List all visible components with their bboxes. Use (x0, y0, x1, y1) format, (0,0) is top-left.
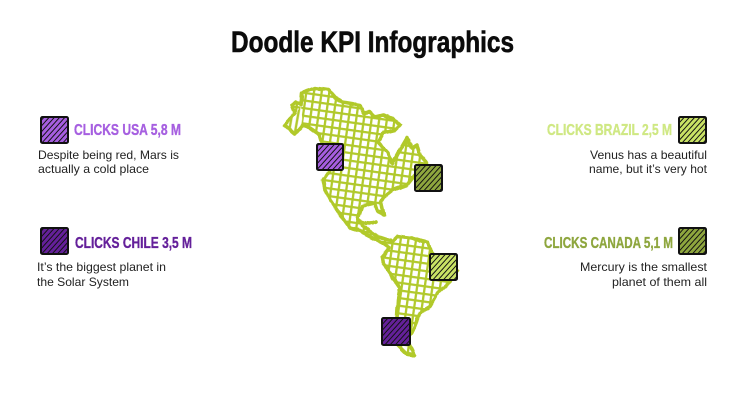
heading: Chile: CLICKS CHILE 3,5 M (75, 235, 192, 252)
marker: Chile (382, 318, 410, 345)
panel: Brazil (547, 117, 708, 176)
text: USA: Despite being red, Mars is (38, 148, 179, 162)
title: Doodle KPI Infographics (231, 26, 514, 59)
icon: Canada swatch (679, 228, 706, 254)
panel: USA (38, 117, 181, 176)
heading: USA: CLICKS USA 5,8 M (74, 122, 181, 139)
text: USA: actually a cold place (38, 162, 149, 176)
heading: Canada: CLICKS CANADA 5,1 M (544, 235, 673, 252)
text: Canada: planet of them all (612, 275, 707, 289)
marker: Canada (415, 165, 442, 191)
icon: Chile swatch (41, 228, 68, 254)
alaska stripes (286, 106, 303, 132)
text: Brazil: Venus has a beautiful (590, 148, 707, 162)
text: Brazil: name, but it’s very hot (589, 162, 708, 176)
panel: Chile (37, 228, 192, 289)
marker: USA (317, 144, 343, 170)
icon: Brazil swatch (679, 117, 706, 143)
text: Chile: It’s the biggest planet in (37, 260, 166, 274)
panel: Canada (544, 228, 708, 289)
map outline (284, 88, 457, 356)
text: Canada: Mercury is the smallest (580, 260, 708, 274)
map: Americas (284, 88, 457, 356)
heading: Brazil: CLICKS BRAZIL 2,5 M (547, 122, 672, 139)
icon: USA swatch (41, 117, 68, 143)
marker: Brazil (430, 254, 457, 280)
text: Chile: the Solar System (37, 275, 129, 289)
